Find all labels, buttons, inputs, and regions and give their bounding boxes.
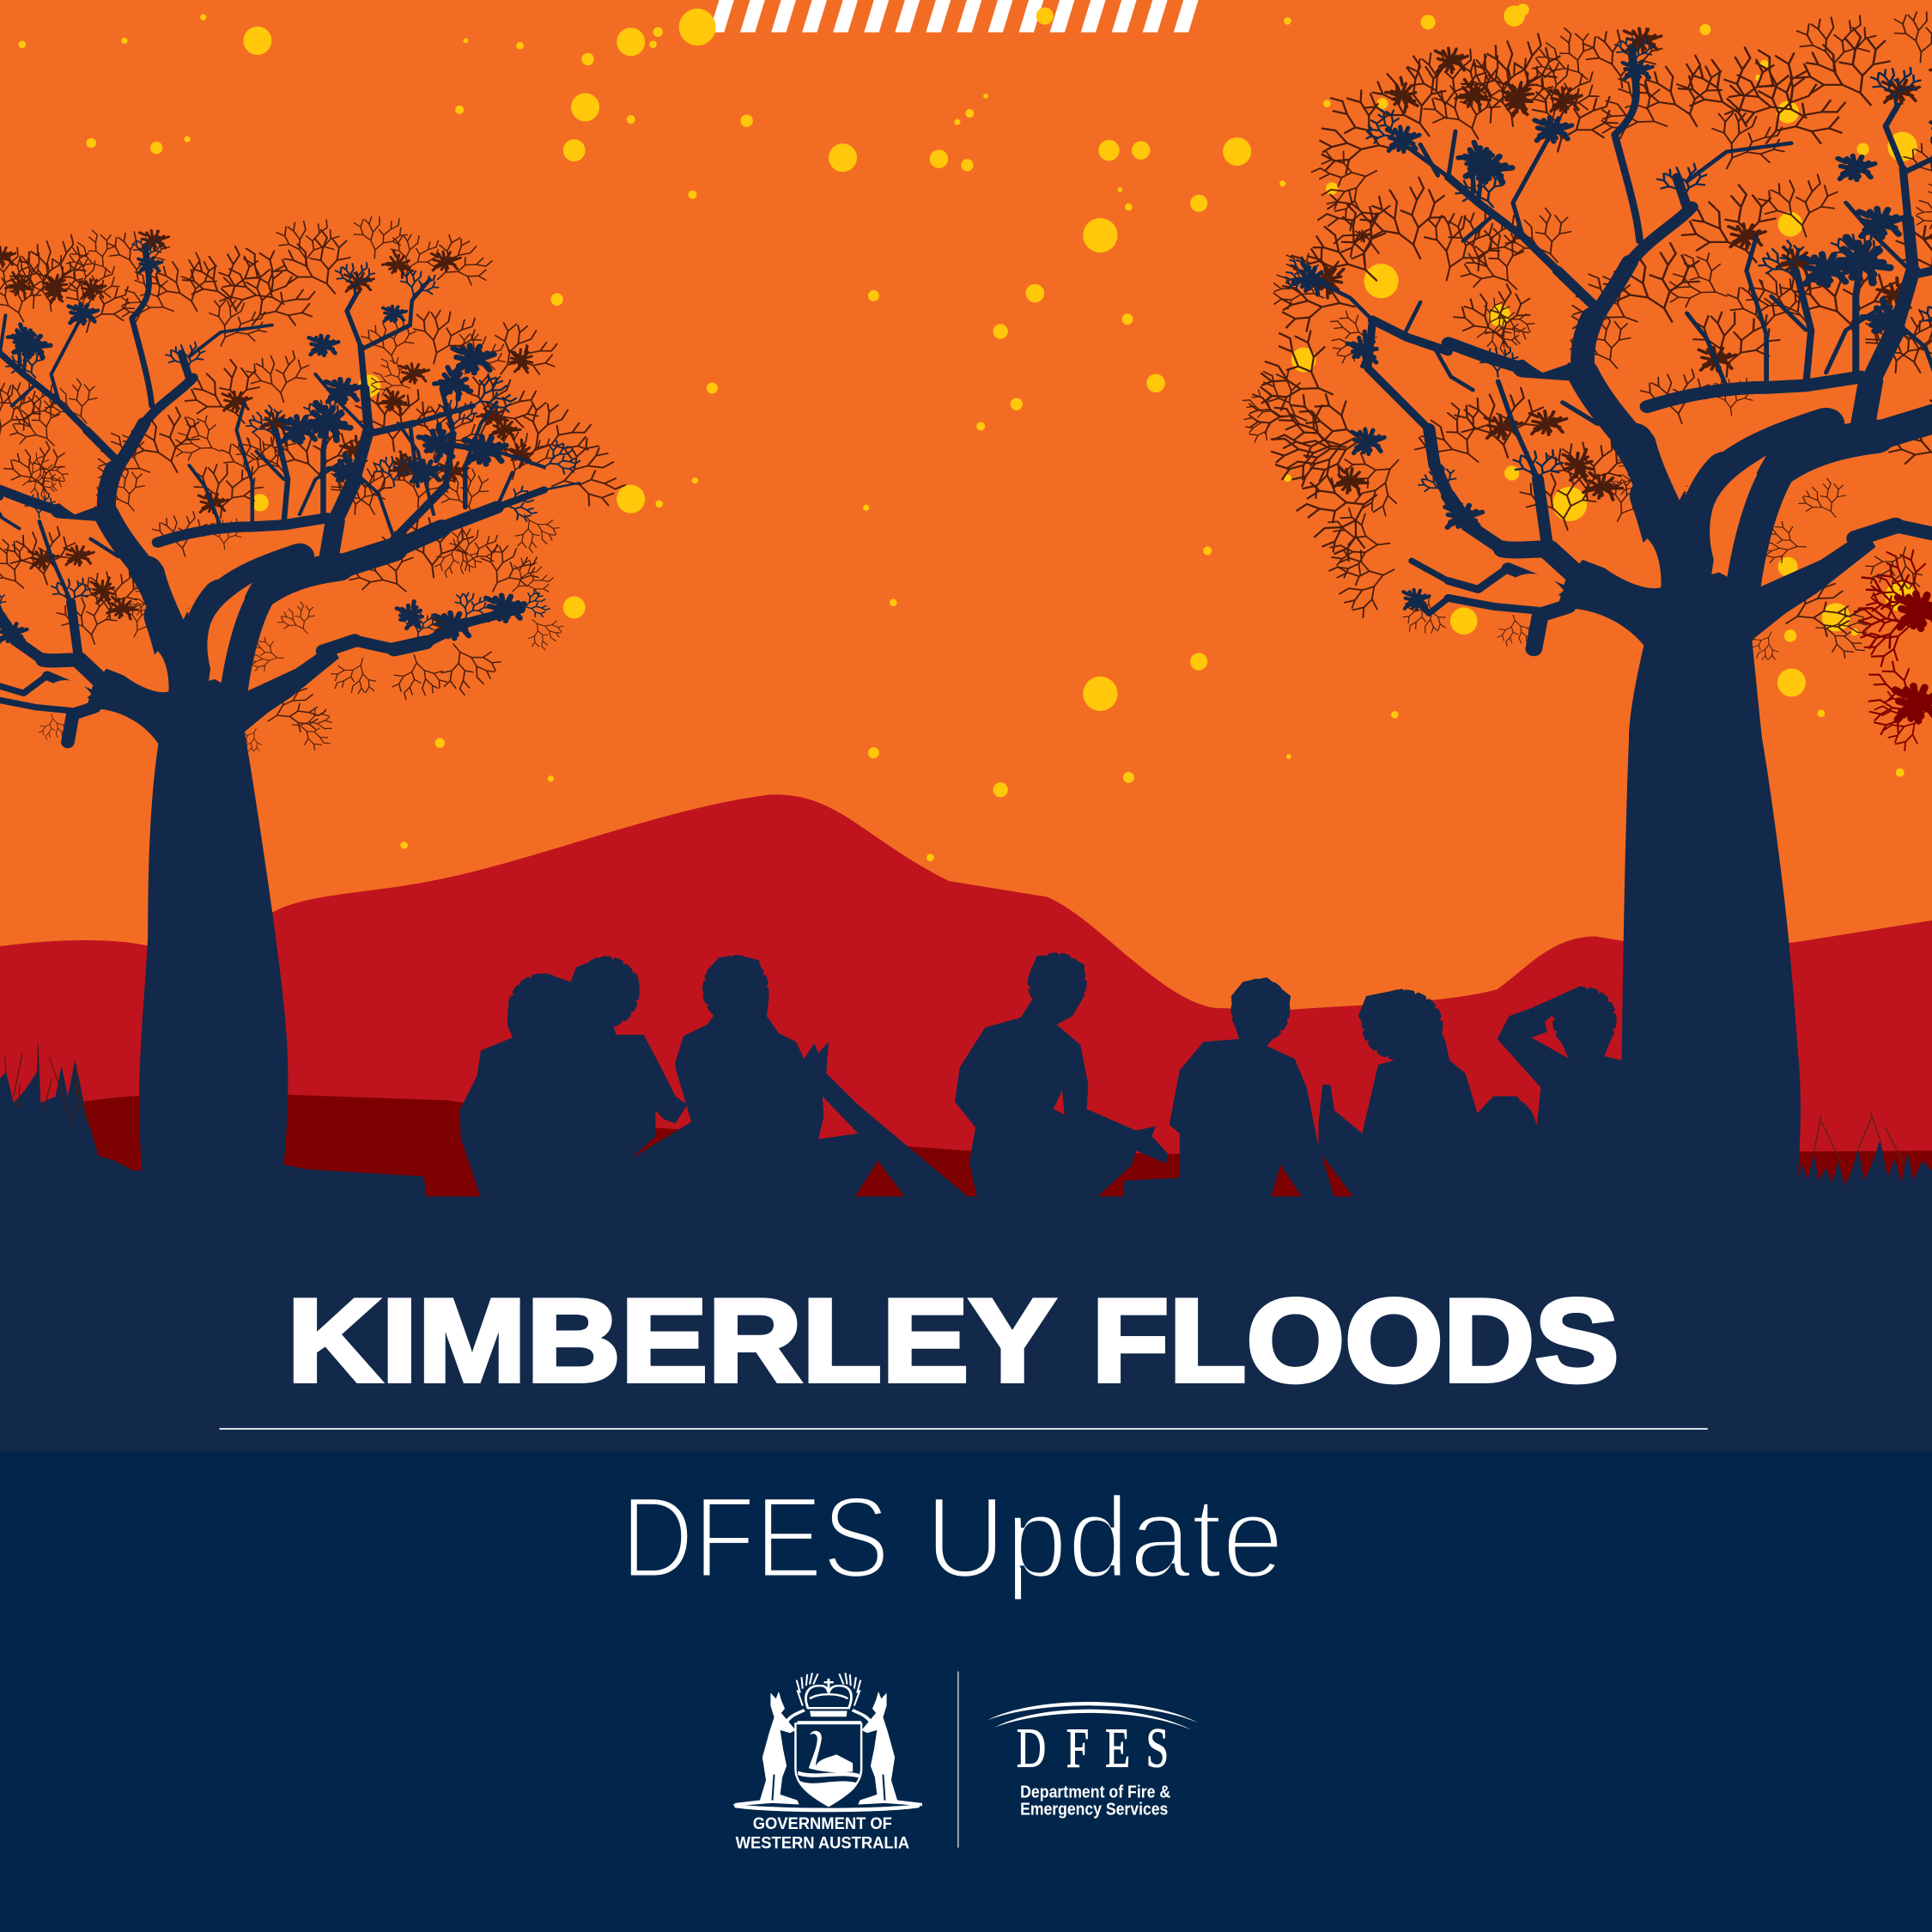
lower navy band <box>0 1451 1932 1932</box>
crown <box>806 1679 851 1708</box>
small distant red tree at right edge <box>1850 539 1932 756</box>
hazard stripes at top <box>709 0 1199 33</box>
left grass tuft <box>0 1042 148 1201</box>
subtitle: Update <box>926 1473 1284 1602</box>
subtitle: DFES <box>621 1473 890 1602</box>
arcs <box>987 1702 1198 1730</box>
ground band <box>0 1164 1932 1451</box>
curly heads <box>510 955 1614 1059</box>
scrolls <box>787 1710 871 1722</box>
yellow sparks <box>19 3 1917 861</box>
logo: Government of Western Australia crest <box>733 1673 922 1852</box>
title: FLOODS <box>1091 1275 1619 1407</box>
swan <box>809 1731 853 1772</box>
department name: Department of Fire & <box>1020 1783 1170 1802</box>
logo divider <box>957 1672 959 1848</box>
left boab tree crown <box>0 212 630 756</box>
kangaroo right <box>858 1692 922 1806</box>
logo: DFES <box>987 1702 1198 1820</box>
bodies <box>459 955 1628 1198</box>
title divider line <box>219 1428 1708 1430</box>
crest artwork <box>733 1673 922 1812</box>
kangaroo left <box>735 1692 799 1806</box>
right boab tree crown <box>1236 6 1932 666</box>
crest base <box>733 1804 920 1812</box>
left boab trunk <box>139 702 288 1183</box>
kangaroo leg details <box>772 1775 884 1801</box>
government text: GOVERNMENT OF <box>753 1814 892 1833</box>
shield water <box>798 1771 860 1806</box>
seated people silhouettes <box>459 955 1628 1198</box>
title <box>287 1275 1619 1407</box>
subtitle <box>621 1473 1284 1602</box>
shield <box>795 1723 861 1806</box>
logo: DFES: Emergency Services <box>1020 1801 1168 1820</box>
red hills <box>0 794 1932 1201</box>
right boab trunk <box>1620 604 1801 1201</box>
right grass tuft <box>1789 1113 1932 1201</box>
raised knee <box>1475 1097 1536 1163</box>
title: KIMBERLEY <box>287 1275 1056 1407</box>
dark red foreground land <box>0 1095 1932 1201</box>
fronds <box>797 1673 860 1706</box>
sky background <box>0 0 1932 1232</box>
DFES letters: DFES <box>1017 1717 1169 1780</box>
logo: Government of Western Australia crest: WESTERN AUSTRALIA <box>736 1833 909 1852</box>
